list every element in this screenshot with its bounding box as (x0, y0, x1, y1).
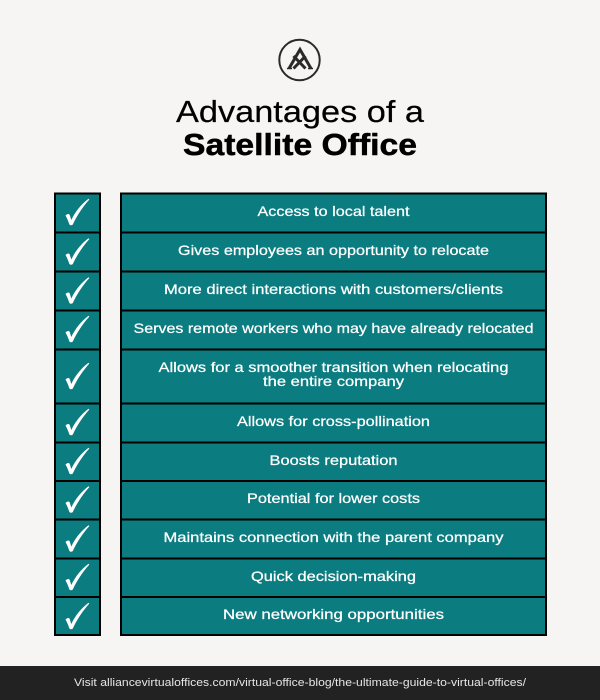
title: Advantages of a (176, 94, 425, 129)
icon: check 4 (66, 316, 89, 342)
row 8 text: Potential for lower costs (247, 490, 420, 506)
row 1 text: Access to local talent (258, 203, 410, 219)
title: Satellite Office (183, 127, 417, 162)
icon: check 10 (66, 564, 89, 590)
advantages table (121, 194, 546, 635)
row 2 text: Gives employees an opportunity to relocate (178, 242, 489, 258)
row 11 text: New networking opportunities (223, 606, 444, 622)
row 7 text: Boosts reputation (270, 452, 398, 468)
check column (55, 194, 100, 635)
icon: check 7 (66, 448, 89, 474)
title (176, 94, 425, 162)
row 10 text: Quick decision-making (251, 568, 416, 584)
icon: check 2 (66, 238, 89, 265)
icon: check 5 (66, 363, 89, 389)
icon: check 11 (66, 603, 89, 629)
icon: check 9 (66, 525, 89, 552)
row 5 text: the entire company (263, 373, 404, 389)
row 5 text (158, 359, 508, 389)
row 3 text: More direct interactions with customers/clients (164, 281, 503, 297)
icon: check 6 (66, 409, 89, 435)
row 9 text: Maintains connection with the parent company (164, 529, 504, 545)
footer bar (0, 666, 600, 700)
icon: check 8 (66, 486, 89, 513)
footer link text: Visit alliancevirtualoffices.com/virtual-office-blog/the-ultimate-guide-to-virtual-offices/ (74, 677, 527, 689)
icon: check 1 (66, 199, 89, 225)
icon: check 3 (66, 277, 89, 304)
icon: logo (279, 40, 320, 80)
row 4 text: Serves remote workers who may have already relocated (134, 320, 534, 336)
row 5 text: Allows for a smoother transition when relocating (158, 359, 508, 375)
row 6 text: Allows for cross-pollination (237, 413, 430, 429)
